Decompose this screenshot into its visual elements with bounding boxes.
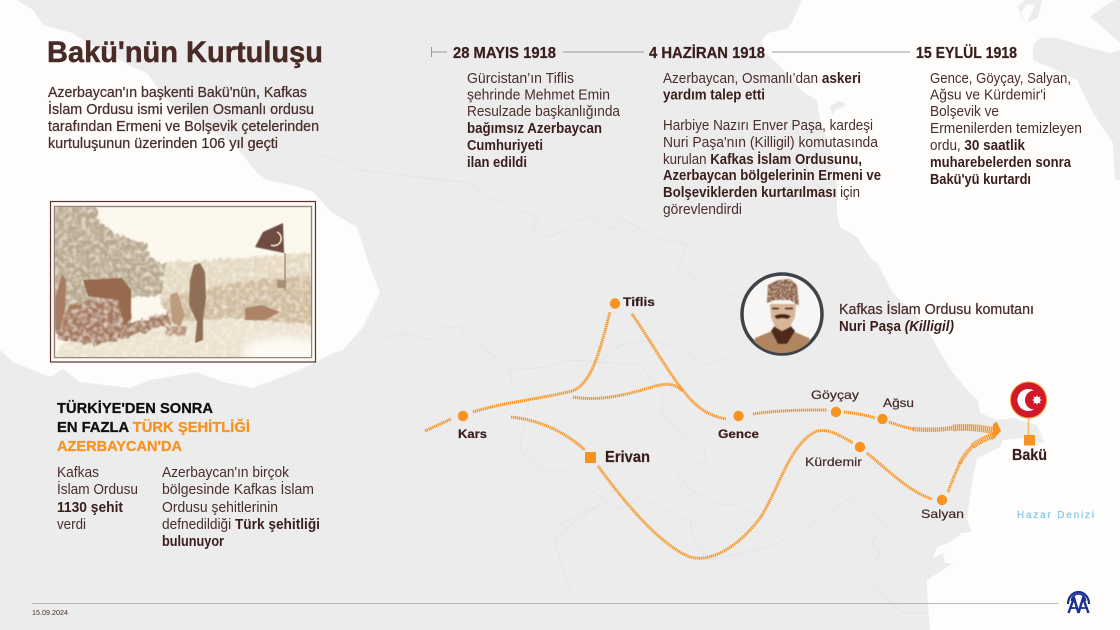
text: 28 Mayıs: Gürcistan’ın Tiflis <box>467 71 574 87</box>
caption: Nuri Paşa: Nuri Paşa (Killigil) <box>839 319 954 335</box>
heading: Türk şehitliği <box>57 400 250 455</box>
footer line and date: 15.09.2024 <box>32 608 68 617</box>
text: 15 Eylül: Bakü'yü kurtardı <box>930 172 1031 188</box>
text: 4 Haziran: kurulan Kafkas İslam Ordusunu, <box>663 151 862 168</box>
pin: Bakü with Azerbaijan flag <box>1010 382 1047 464</box>
node: Göyçay: Göyçay <box>811 389 859 402</box>
node: Tiflis: Tiflis <box>623 296 655 309</box>
node: Kürdemir <box>805 442 865 469</box>
intro text: İslam Ordusu ismi verilen Osmanlı ordusu <box>48 100 314 118</box>
title: Bakü'nün Kurtuluşu <box>47 36 323 69</box>
text: 4 Haziran: Azerbaycan, Osmanlı’dan askeri <box>663 71 861 87</box>
text: şehitlik <box>162 465 320 550</box>
text: 4 Haziran: Azerbaycan bölgelerinin Ermeni ve <box>663 168 881 184</box>
node: Erivan: Erivan <box>605 449 650 466</box>
route lines <box>425 312 1001 558</box>
text: 28 Mayıs: bağımsız Azerbaycan <box>467 121 602 137</box>
node: Salyan <box>921 495 964 521</box>
date: 15 Eylül: 15 EYLÜL 1918 <box>916 43 1017 62</box>
text: 1130 şehit <box>57 465 138 533</box>
caption: Nuri Paşa <box>839 300 1034 335</box>
node: Kürdemir: Kürdemir <box>805 456 862 469</box>
text: 4 Haziran: görevlendirdi <box>663 202 742 218</box>
text: şehitlik: Ordusu şehitlerinin <box>162 500 278 516</box>
heading: Türk şehitliği: AZERBAYCAN'DA <box>57 438 182 455</box>
text: 1130 şehit: 1130 şehit <box>57 500 123 516</box>
text: 28 Mayıs <box>467 71 620 171</box>
node: Kars <box>458 411 487 441</box>
node: Erivan <box>585 449 650 466</box>
pin: Bakü with Azerbaijan flag: Bakü <box>1012 447 1047 464</box>
node: Ağsu <box>877 397 914 424</box>
text: 4 Haziran: Bolşeviklerden kurtarılması için <box>663 185 860 201</box>
logo: AA <box>1068 592 1089 613</box>
date: 28 Mayıs: 28 MAYIS 1918 <box>453 45 556 62</box>
intro text: kurtuluşunun üzerinden 106 yıl geçti <box>48 136 278 152</box>
text: 4 Haziran: Harbiye Nazırı Enver Paşa, kardeşi <box>663 118 873 134</box>
node: Kars: Kars <box>458 428 487 441</box>
date: 4 Haziran: 4 HAZİRAN 1918 <box>649 44 765 62</box>
text: 1130 şehit: İslam Ordusu <box>57 480 138 498</box>
timeline <box>432 43 1017 62</box>
text: 1130 şehit: verdi <box>57 517 86 533</box>
node: Ağsu: Ağsu <box>883 397 914 410</box>
text: 4 Haziran <box>663 71 881 218</box>
photo: soldiers with flag <box>50 202 327 367</box>
text: şehitlik: bulunuyor <box>162 534 224 550</box>
text: şehitlik: bölgesinde Kafkas İslam <box>162 480 314 498</box>
intro text: tarafından Ermeni ve Bolşevik çetelerinden <box>48 119 319 135</box>
text: 28 Mayıs: Cumhuriyeti <box>467 138 543 154</box>
text: 28 Mayıs: Resulzade başkanlığında <box>467 104 620 120</box>
text: 15 Eylül: Ağsu ve Kürdemir'i <box>930 88 1046 104</box>
text: 15 Eylül: muharebelerden sonra <box>930 155 1072 171</box>
node: Göyçay <box>811 389 859 417</box>
text: 1130 şehit: Kafkas <box>57 465 99 481</box>
heading: Türk şehitliği: EN FAZLA TÜRK ŞEHİTLİĞİ <box>57 418 250 436</box>
text: 4 Haziran: Nuri Paşa'nın (Killigil) komutasında <box>663 135 878 151</box>
text: 4 Haziran: yardım talep etti <box>663 88 765 104</box>
arrow head <box>992 422 1001 440</box>
text: 15 Eylül <box>930 71 1082 188</box>
text: 28 Mayıs: ilan edildi <box>467 155 527 171</box>
intro text <box>48 85 319 152</box>
text: 15 Eylül: Ermenilerden temizleyen <box>930 121 1082 137</box>
text: 15 Eylül: Bolşevik ve <box>930 104 999 120</box>
portrait: Nuri Paşa <box>742 274 822 355</box>
label: Hazar Denizi: Hazar Denizi <box>1017 510 1094 521</box>
intro text: Azerbaycan'ın başkenti Bakü'nün, Kafkas <box>48 85 307 101</box>
text: 28 Mayıs: şehrinde Mehmet Emin <box>467 88 610 104</box>
heading: Türk şehitliği: TÜRKİYE'DEN SONRA <box>57 400 213 417</box>
node: Salyan: Salyan <box>921 508 964 521</box>
text: 15 Eylül: Gence, Göyçay, Salyan, <box>930 71 1071 87</box>
node: Gence <box>718 411 760 441</box>
text: 15 Eylül: ordu, 30 saatlik <box>930 138 1025 154</box>
text: şehitlik: Azerbaycan'ın birçok <box>162 465 290 481</box>
text: şehitlik: defnedildiği Türk şehitliği <box>162 517 320 533</box>
node: Gence: Gence <box>718 428 760 441</box>
node: Tiflis <box>610 296 655 309</box>
caption: Nuri Paşa: Kafkas İslam Ordusu komutanı <box>839 300 1034 318</box>
